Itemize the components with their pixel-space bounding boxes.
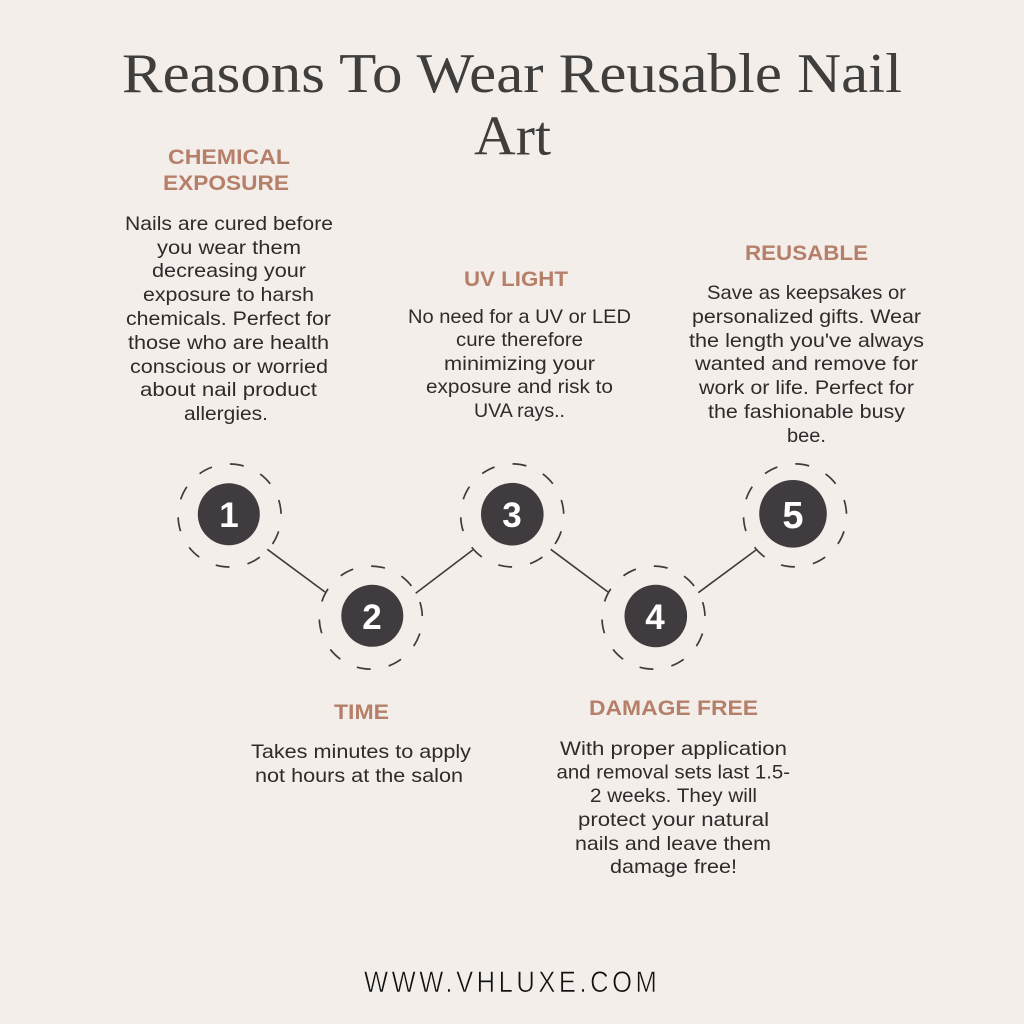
text block: uv light: cure therefore xyxy=(456,329,583,351)
step 4 xyxy=(602,566,705,669)
text block: time xyxy=(251,741,471,787)
text block: time: not hours at the salon xyxy=(255,765,463,787)
text block: chemical exposure: about nail product xyxy=(140,379,318,401)
text block: reusable: bee. xyxy=(787,425,826,447)
text block: reusable: personalized gifts. Wear xyxy=(692,306,922,328)
footer website: WWW.VHLUXE.COM xyxy=(364,965,657,998)
connector 3 to 4 xyxy=(551,549,608,592)
text block: reusable: Save as keepsakes or xyxy=(707,282,907,304)
title: Reasons To Wear Reusable Nail xyxy=(122,43,902,105)
text block: damage free: nails and leave them xyxy=(575,833,771,855)
text block: damage free: protect your natural xyxy=(578,809,769,831)
connector 4 to 5 xyxy=(698,550,756,593)
text block: damage free: and removal sets last 1.5- xyxy=(556,762,790,784)
title xyxy=(122,43,902,168)
step 3: 3 xyxy=(502,496,522,535)
text block: uv light: minimizing your xyxy=(444,353,596,375)
text block: chemical exposure: allergies. xyxy=(184,403,268,425)
connector 2 to 3 xyxy=(416,550,473,593)
text block: damage free: With proper application xyxy=(560,738,787,760)
text block: uv light xyxy=(408,306,631,422)
text block: damage free xyxy=(556,738,790,878)
text block: reusable: the fashionable busy xyxy=(708,401,905,423)
heading: chemical exposure: CHEMICAL xyxy=(168,146,290,169)
text block: chemical exposure: Nails are cured before xyxy=(125,213,333,235)
heading: damage free: DAMAGE FREE xyxy=(589,697,758,720)
text block: chemical exposure: conscious or worried xyxy=(130,356,328,378)
step 1 xyxy=(178,464,281,567)
step 2: 2 xyxy=(362,598,382,637)
text block: reusable: the length you've always xyxy=(689,330,924,352)
heading: chemical exposure: EXPOSURE xyxy=(163,172,289,195)
heading: chemical exposure xyxy=(163,146,290,195)
text block: chemical exposure: exposure to harsh xyxy=(143,284,314,306)
text block: chemical exposure: chemicals. Perfect for xyxy=(126,308,332,330)
heading: reusable: REUSABLE xyxy=(745,242,868,265)
text block: reusable: wanted and remove for xyxy=(694,353,919,375)
text block: uv light: UVA rays.. xyxy=(474,400,565,422)
heading: uv light: UV LIGHT xyxy=(464,268,568,291)
text block: reusable xyxy=(689,282,924,447)
text block: uv light: No need for a UV or LED xyxy=(408,306,631,328)
step 4: 4 xyxy=(645,598,665,637)
step 2 xyxy=(319,566,422,669)
connector 1 to 2 xyxy=(267,549,325,592)
text block: time: Takes minutes to apply xyxy=(251,741,471,763)
text block: damage free: 2 weeks. They will xyxy=(590,785,757,807)
step 1: 1 xyxy=(219,496,239,535)
text block: chemical exposure: those who are health xyxy=(128,332,329,354)
step 5 xyxy=(744,464,846,567)
text block: reusable: work or life. Perfect for xyxy=(698,377,915,399)
step 5: 5 xyxy=(782,495,804,537)
text block: chemical exposure: decreasing your xyxy=(152,260,307,282)
text block: damage free: damage free! xyxy=(610,856,737,878)
text block: chemical exposure: you wear them xyxy=(157,237,301,259)
step 3 xyxy=(461,464,564,567)
heading: time: TIME xyxy=(334,701,389,724)
text block: chemical exposure xyxy=(125,213,333,425)
text block: uv light: exposure and risk to xyxy=(426,376,613,398)
title: Art xyxy=(474,106,551,168)
